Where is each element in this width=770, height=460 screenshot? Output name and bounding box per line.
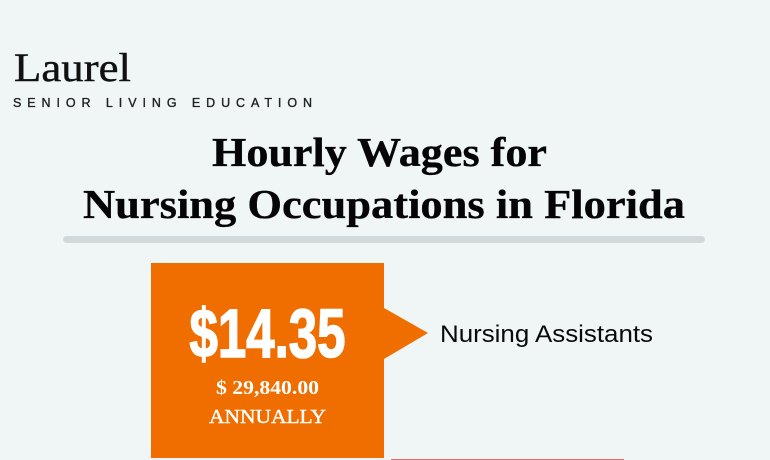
next card top edge — [391, 459, 624, 460]
annually label: ANNUALLY — [209, 406, 326, 428]
title line 1: Hourly Wages for — [212, 129, 547, 175]
logo: Laurel Senior Living Education — [13, 45, 312, 110]
wage card: nursing assistants — [151, 263, 653, 458]
orange card with pointer — [151, 263, 428, 458]
title divider — [63, 236, 705, 243]
title — [83, 129, 685, 227]
occupation label: Nursing Assistants — [440, 321, 653, 348]
title line 2: Nursing Occupations in Florida — [83, 181, 685, 227]
logo tagline: SENIOR LIVING EDUCATION — [13, 96, 312, 110]
hourly wage: $14.35 — [190, 295, 346, 372]
logo wordmark: Laurel — [14, 45, 131, 90]
annual wage: $ 29,840.00 — [216, 377, 319, 399]
